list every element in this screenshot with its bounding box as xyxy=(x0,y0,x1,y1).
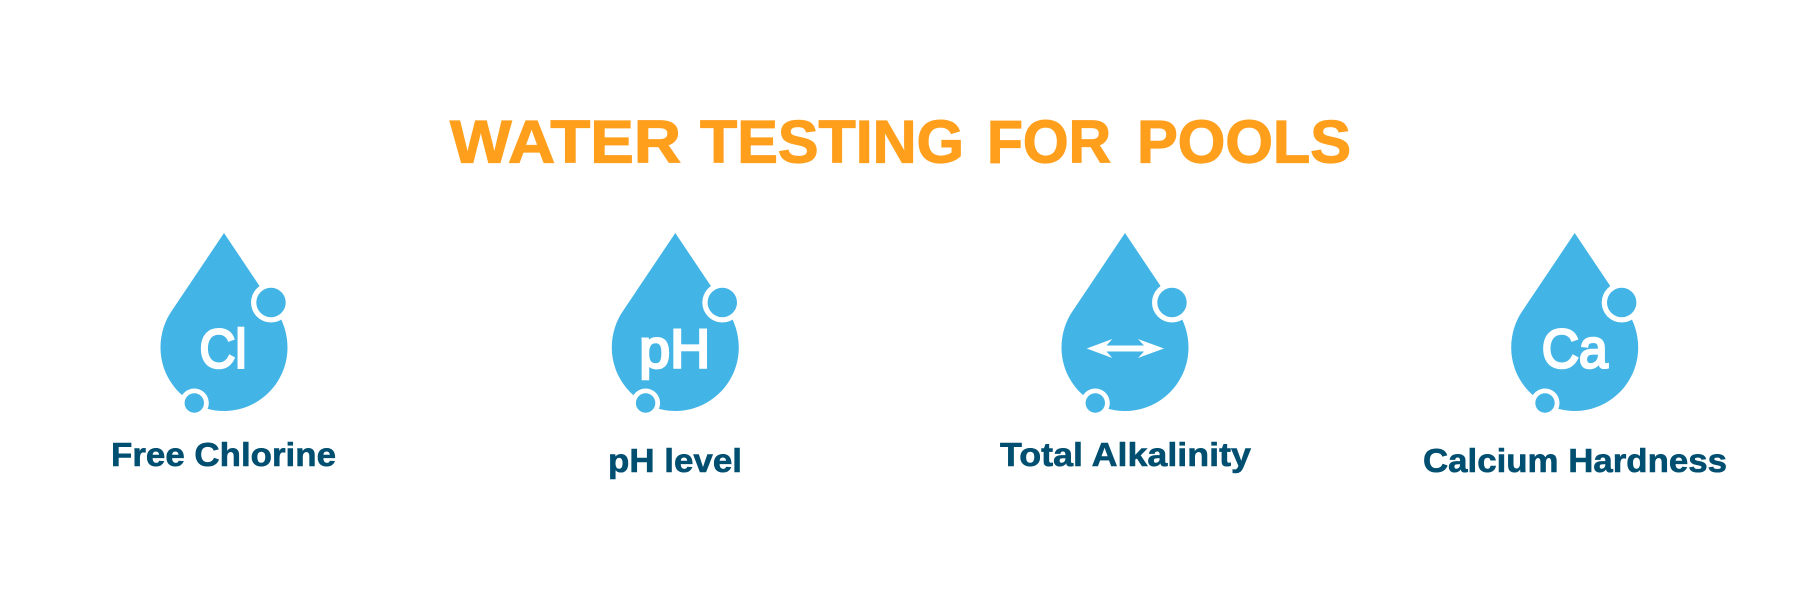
icon: water drop with Ca xyxy=(1511,233,1642,418)
title: TESTING xyxy=(700,108,964,176)
label: Calcium Hardness: Calcium Hardness xyxy=(1423,442,1727,479)
icon: water drop with double arrow xyxy=(1062,233,1192,418)
label: Total Alkalinity: Total Alkalinity xyxy=(1000,436,1252,473)
icon: double arrow xyxy=(1087,339,1164,358)
panel: total alkalinity xyxy=(1000,233,1252,473)
icon: water drop with Ca: Ca xyxy=(1542,318,1608,380)
title: POOLS xyxy=(1137,108,1351,176)
icon: water drop with Cl: Cl xyxy=(200,318,246,380)
icon: water drop with pH xyxy=(612,233,742,418)
icon: water drop with Cl xyxy=(160,233,291,418)
panel: free chlorine xyxy=(111,233,336,473)
title: WATER xyxy=(450,108,681,176)
label: Free Chlorine: Free Chlorine xyxy=(111,436,336,473)
panel: pH level xyxy=(608,233,742,479)
title xyxy=(450,108,1351,176)
label: pH level: pH level xyxy=(608,442,742,479)
panel: calcium hardness xyxy=(1423,233,1727,479)
icon: water drop with pH: pH xyxy=(639,318,710,380)
title: FOR xyxy=(987,108,1111,176)
